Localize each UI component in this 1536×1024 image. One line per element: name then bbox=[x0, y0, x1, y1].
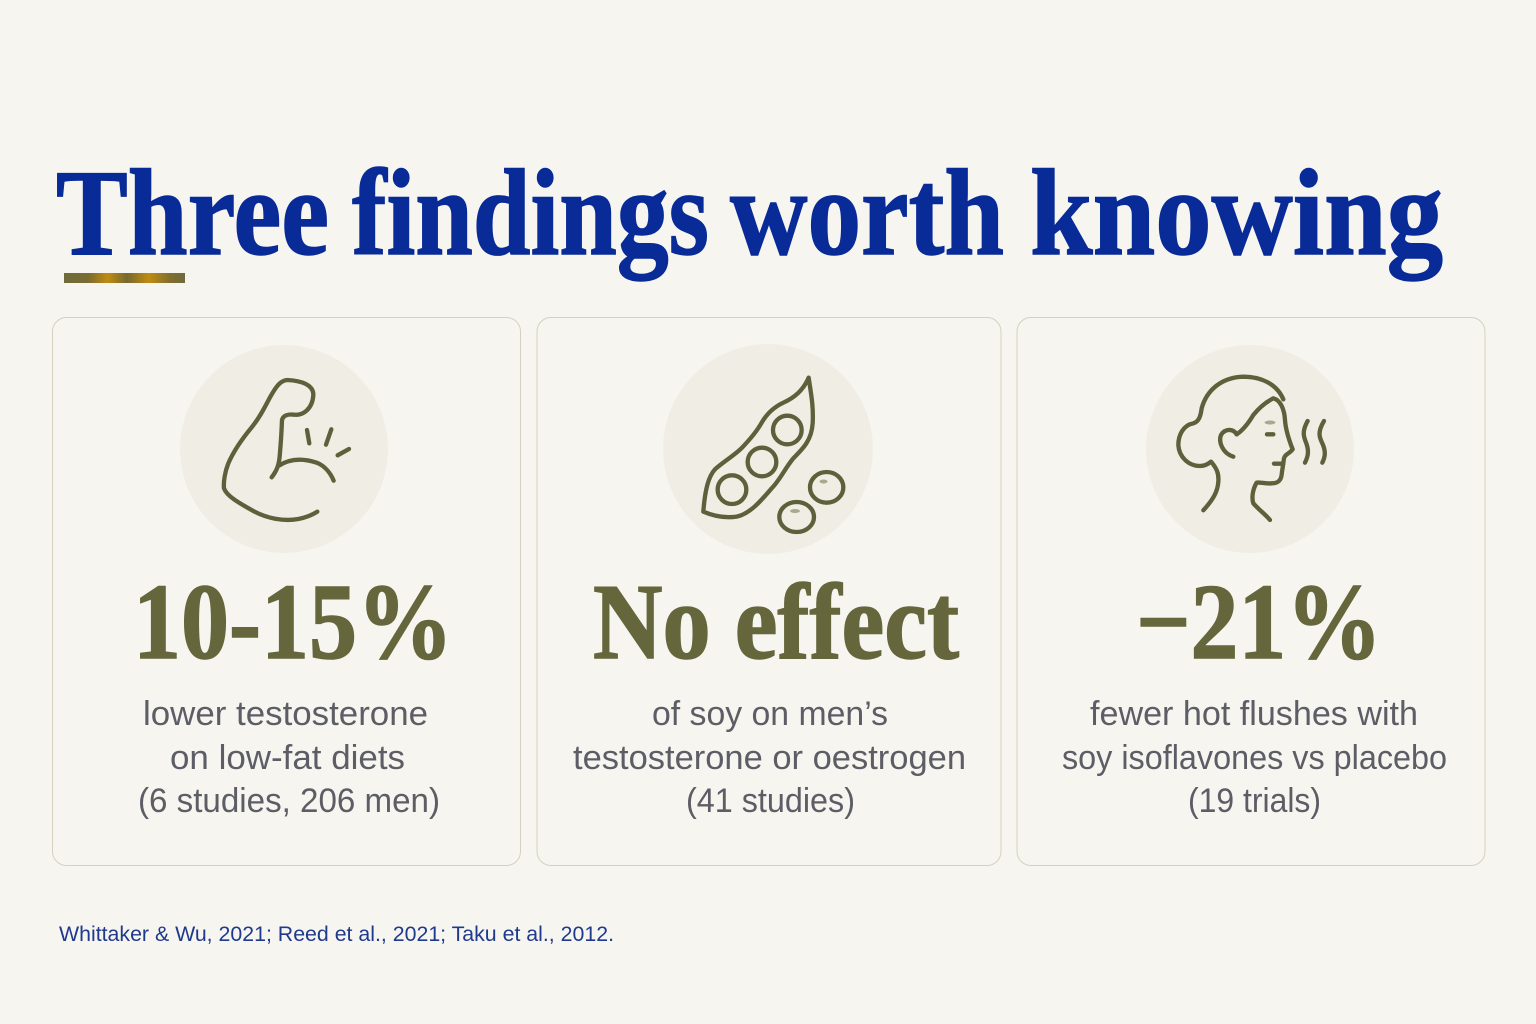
description bbox=[138, 695, 440, 820]
title: worth bbox=[730, 144, 1004, 281]
description: on low-fat diets bbox=[170, 739, 405, 777]
panel: hot flushes bbox=[1017, 318, 1485, 866]
eyebrow bbox=[1264, 420, 1276, 424]
description bbox=[573, 695, 966, 820]
icon: woman profile with heat waves bbox=[1178, 377, 1325, 520]
title: Three bbox=[56, 144, 329, 281]
icon circle: muscle bbox=[180, 345, 388, 553]
panel: low-fat diets bbox=[52, 318, 520, 866]
title: knowing bbox=[1030, 144, 1443, 281]
description: of soy on men’s bbox=[652, 695, 888, 733]
card outline bbox=[1017, 318, 1485, 866]
description: (41 studies) bbox=[686, 782, 855, 820]
source citation: Whittaker & Wu, 2021; Reed et al., 2021; Taku et al., 2012. bbox=[59, 923, 614, 946]
bean highlights bbox=[790, 480, 828, 513]
statistic: −21% bbox=[1136, 563, 1382, 682]
description: fewer hot flushes with bbox=[1090, 695, 1418, 733]
description: lower testosterone bbox=[143, 695, 428, 733]
description: testosterone or oestrogen bbox=[573, 739, 966, 777]
icon: flexed arm bbox=[224, 380, 349, 520]
icon: soybean pod bbox=[703, 378, 843, 532]
title: findings bbox=[352, 144, 709, 281]
panel: soy and hormones bbox=[537, 318, 1001, 866]
title accent bar bbox=[64, 273, 185, 283]
statistic: No effect bbox=[593, 563, 959, 682]
card outline bbox=[52, 318, 520, 866]
description: (19 trials) bbox=[1188, 782, 1321, 820]
title bbox=[56, 144, 1443, 281]
icon circle: soybean bbox=[663, 344, 873, 554]
icon circle: woman bbox=[1146, 345, 1354, 553]
statistic: 10-15% bbox=[133, 563, 453, 682]
description: (6 studies, 206 men) bbox=[138, 782, 440, 820]
card outline bbox=[537, 318, 1001, 866]
description: soy isoflavones vs placebo bbox=[1062, 739, 1447, 777]
description bbox=[1062, 695, 1447, 820]
